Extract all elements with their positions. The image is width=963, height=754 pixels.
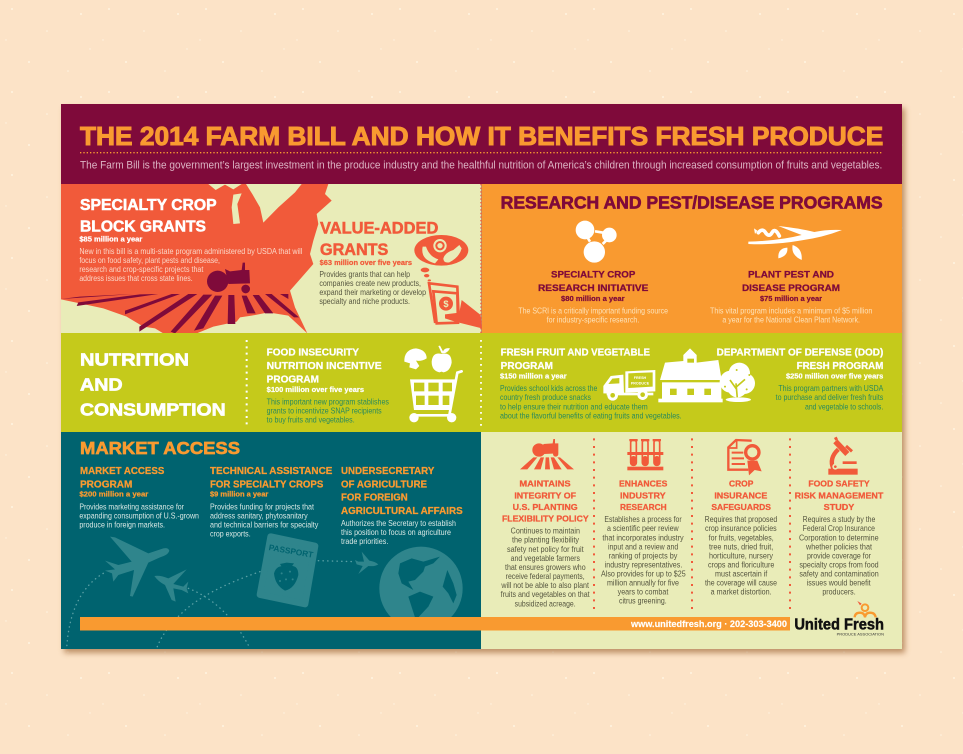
column: food safety risk management study: STUDY: [824, 502, 855, 512]
column: maintains integrity: that ensures growers who: [505, 563, 586, 572]
column: maintains integrity: U.S. PLANTING: [513, 502, 578, 512]
sub-block: fresh fruit and vegetable program: FRESH FRUIT AND VEGETABLE: [501, 348, 650, 359]
text: specialty crop body: address issues that cross state lines.: [79, 274, 193, 283]
icon: fruit tree: [720, 363, 755, 402]
sub-block: plant pest and disease program: DISEASE PROGRAM: [742, 283, 840, 293]
column: crop insurance safeguards: the coverage will cause: [705, 578, 777, 587]
column: technical assistance for specialty crops: crop exports.: [210, 530, 251, 539]
text: specialty crop body: focus on food safety, plant pests and disease,: [79, 256, 220, 265]
flight paths: [67, 561, 355, 648]
sub-block: department of defense fresh program: and vegetable to schools.: [805, 402, 883, 411]
column: crop insurance safeguards: [705, 440, 778, 597]
column: market access program: $200 million a year: [79, 490, 148, 499]
panel: policy safeguards: [481, 432, 902, 649]
column: food safety risk management study: safety and contamination: [799, 569, 879, 578]
column: market access program: MARKET ACCESS: [80, 466, 165, 477]
text: specialty crop body: research and crop-specific projects that: [79, 265, 204, 274]
text: value-added body: expand their marketing or develop: [319, 288, 426, 297]
column: undersecretary of agriculture: this position to focus on agriculture: [341, 528, 451, 537]
column: maintains integrity: fruits and vegetables on that: [501, 590, 590, 599]
column: crop insurance safeguards: crop insurance policies: [705, 524, 777, 533]
column: market access program: expanding consumption of U.S.-grown: [79, 511, 199, 520]
column: food safety risk management study: Corporation to determine: [799, 533, 879, 542]
sub-block: food insecurity nutrition incentive program: $100 million over five years: [267, 385, 364, 394]
column: undersecretary of agriculture: Authorizes the Secretary to establish: [341, 519, 456, 528]
icon: certificate with ribbon: [728, 440, 762, 475]
sub-block: specialty crop research initiative: [518, 270, 668, 324]
column: market access program: Provides marketing assistance for: [79, 502, 184, 511]
icon: passport: PASSPORT: [268, 542, 314, 560]
column: maintains integrity: FLEXIBILITY POLICY: [502, 513, 589, 523]
column: market access program: produce in foreign markets.: [79, 520, 165, 529]
sub-block: specialty crop research initiative: The SCRI is a critically important funding source: [518, 306, 668, 315]
heading: value-added grants: [320, 219, 439, 267]
column: maintains integrity: subsidized acreage.: [515, 599, 576, 608]
sub-block: plant pest and disease program: $75 million a year: [760, 294, 822, 303]
panel: market access: [61, 432, 481, 649]
column: food safety risk management study: RISK MANAGEMENT: [795, 490, 884, 500]
heading: specialty crop block grants: SPECIALTY CROP: [80, 197, 217, 214]
sub-block: plant pest and disease program: PLANT PEST AND: [748, 270, 834, 280]
icon: money in hand: [429, 283, 482, 328]
sub-block: food insecurity nutrition incentive program: to buy fruits and vegetables.: [267, 415, 355, 424]
panel: nutrition and consumption: [61, 333, 902, 432]
column: technical assistance for specialty crops: $9 million a year: [210, 490, 268, 499]
sub-block: plant pest and disease program: This vital program includes a minimum of $5 million: [710, 306, 872, 315]
icon: apple: [432, 346, 452, 372]
column: technical assistance for specialty crops: TECHNICAL ASSISTANCE: [210, 466, 333, 477]
column: crop insurance safeguards: for fruits, vegetables,: [709, 533, 774, 542]
column: undersecretary of agriculture: OF AGRICULTURE: [341, 479, 427, 490]
logo: United Fresh: United Fresh: [794, 616, 884, 633]
sub-block: fresh fruit and vegetable program: to help ensure their nutrition and educate them: [500, 402, 648, 411]
icon: test tubes: [627, 439, 663, 470]
sub-block: fresh fruit and vegetable program: $150 million a year: [500, 371, 567, 380]
heading: market access: MARKET ACCESS: [80, 438, 240, 458]
sub-block: food insecurity nutrition incentive program: NUTRITION INCENTIVE: [267, 361, 382, 372]
field furrows: [61, 294, 299, 333]
hills: [61, 299, 307, 333]
sub-block: specialty crop research initiative: SPECIALTY CROP: [551, 270, 635, 280]
column: undersecretary of agriculture: AGRICULTURAL AFFAIRS: [341, 506, 463, 517]
panel: header: [61, 104, 902, 184]
heading: specialty crop block grants: BLOCK GRANTS: [80, 219, 206, 236]
column: enhances industry research: million annually for five: [607, 578, 679, 587]
column: enhances industry research: citrus greening.: [619, 597, 667, 606]
sub-block: food insecurity nutrition incentive program: This important new program stablishes: [267, 397, 389, 406]
column: food safety risk management study: whether policies that: [805, 542, 873, 551]
icon: branch with worm: [748, 226, 842, 260]
text: specialty crop body: New in this bill is a multi-state program administered by USDA that will: [79, 247, 302, 256]
panel: specialty crop and value-added grants: [61, 184, 482, 333]
heading: nutrition and consumption: CONSUMPTION: [80, 400, 226, 420]
sub-block: fresh fruit and vegetable program: [500, 348, 682, 420]
column: market access program: [79, 466, 199, 529]
column: enhances industry research: ranking of projects by: [609, 551, 678, 560]
sub-block: specialty crop research initiative: for industry-specific research.: [547, 315, 639, 324]
sub-block: fresh fruit and vegetable program: country fresh produce snacks: [500, 393, 591, 402]
icon: molecule: [576, 221, 617, 263]
sub-block: fresh fruit and vegetable program: about the flavorful benefits of eating fruits and vegetables.: [500, 411, 682, 420]
column: crop insurance safeguards: SAFEGUARDS: [711, 502, 771, 512]
column: enhances industry research: a scientific peer review: [607, 524, 679, 533]
column: maintains integrity: [500, 439, 590, 608]
heading: RESEARCH AND PEST/DISEASE PROGRAMS: [501, 192, 883, 212]
column: market access program: PROGRAM: [80, 479, 132, 490]
sub-block: department of defense fresh program: This program partners with USDA: [778, 384, 884, 393]
title: THE 2014 FARM BILL AND HOW IT BENEFITS FRESH PRODUCE: [80, 121, 883, 151]
column: enhances industry research: RESEARCH: [620, 502, 667, 512]
column: enhances industry research: ENHANCES: [619, 479, 668, 489]
sub-block: fresh fruit and vegetable program: Provides school kids across the: [500, 384, 598, 393]
column: maintains integrity: MAINTAINS: [519, 479, 571, 489]
divider: red dotted line: [480, 184, 482, 333]
heading: nutrition and consumption: AND: [80, 375, 123, 395]
column: crop insurance safeguards: Requires that proposed: [705, 515, 778, 524]
column: maintains integrity: the planting flexibility: [512, 536, 580, 545]
sub-block: department of defense fresh program: FRESH PROGRAM: [797, 361, 883, 372]
column: crop insurance safeguards: horticulture, nursery: [709, 551, 774, 560]
icon: globe: [379, 547, 463, 630]
text: value-added body: [319, 270, 426, 306]
icon: barn: [658, 348, 723, 402]
column: enhances industry research: [601, 439, 686, 606]
column: enhances industry research: input and a review and: [608, 542, 679, 551]
map of the United States: [61, 184, 332, 333]
heading: value-added grants: GRANTS: [320, 241, 388, 259]
column: food safety risk management study: producers.: [822, 588, 856, 597]
column: crop insurance safeguards: crops and floriculture: [708, 560, 775, 569]
column: maintains integrity: receive federal payments,: [506, 572, 585, 581]
icon: shopping cart: [409, 371, 462, 422]
sub-block: fresh fruit and vegetable program: PROGRAM: [501, 361, 553, 372]
sub-block: food insecurity nutrition incentive program: [267, 348, 389, 424]
column: maintains integrity: INTEGRITY OF: [514, 490, 576, 500]
text: specialty crop body: [79, 247, 302, 283]
icon: large airplane: [105, 537, 169, 597]
column: technical assistance for specialty crops: Provides funding for projects that: [210, 502, 315, 511]
sub-block: department of defense fresh program: $250 million over five years: [786, 371, 883, 380]
column: crop insurance safeguards: tree nuts, dried fruit,: [709, 542, 773, 551]
column: technical assistance for specialty crops: [210, 466, 333, 539]
column: crop insurance safeguards: INSURANCE: [714, 490, 768, 500]
sub-block: specialty crop research initiative: RESEARCH INITIATIVE: [538, 283, 648, 293]
column: undersecretary of agriculture: UNDERSECRETARY: [341, 466, 435, 477]
column: technical assistance for specialty crops: and technical barriers for specialty: [210, 520, 319, 529]
text: value-added body: Provides grants that can help: [319, 270, 410, 279]
column: technical assistance for specialty crops: address sanitary, phytosanitary: [210, 511, 308, 520]
icon: delivery truck: PRODUCE: [631, 381, 650, 385]
sub-block: food insecurity nutrition incentive program: PROGRAM: [267, 374, 319, 385]
column: enhances industry research: industry representatives.: [605, 560, 682, 569]
heading: nutrition and consumption: NUTRITION: [80, 350, 189, 370]
column: food safety risk management study: Federal Crop Insurance: [803, 524, 875, 533]
column: food safety risk management study: FOOD SAFETY: [808, 479, 870, 489]
sub-block: plant pest and disease program: [710, 270, 872, 324]
heading: specialty crop block grants: $85 million a year: [79, 235, 142, 244]
panel: research and pest/disease programs: [482, 184, 902, 333]
icon: microscope: [828, 438, 858, 475]
sub-block: plant pest and disease program: a year for the National Clean Plant Network.: [722, 315, 860, 324]
column: enhances industry research: Also provides for up to $25: [601, 569, 686, 578]
sub-block: food insecurity nutrition incentive program: FOOD INSECURITY: [267, 348, 359, 359]
column: undersecretary of agriculture: [341, 466, 463, 546]
column: enhances industry research: years to combat: [618, 588, 669, 597]
column: maintains integrity: and vegetable farmers: [511, 554, 580, 563]
column: food safety risk management study: provide coverage for: [807, 551, 871, 560]
icon: thought bubble with produce: [414, 235, 468, 281]
icon: mushroom: [404, 348, 427, 369]
icon: tractor and furrows: [520, 439, 574, 469]
column: maintains integrity: will not be able to also plant: [500, 581, 590, 590]
column: undersecretary of agriculture: FOR FOREIGN: [341, 493, 408, 504]
column: undersecretary of agriculture: trade priorities.: [341, 537, 388, 546]
icon: small airplane: [154, 569, 188, 602]
column: food safety risk management study: [795, 438, 884, 597]
panel shadow: [64, 108, 905, 653]
column: enhances industry research: Establishes a process for: [604, 515, 682, 524]
heading: nutrition and consumption: [80, 350, 226, 420]
sub-block: food insecurity nutrition incentive program: grants to incentivize SNAP recipients: [267, 406, 382, 415]
icon: money in hand: $: [443, 299, 449, 309]
sub-block: department of defense fresh program: DEPARTMENT OF DEFENSE (DOD): [717, 348, 883, 359]
sub-block: specialty crop research initiative: $80 million a year: [561, 294, 625, 303]
footer bar: www.unitedfresh.org · 202-303-3400: [630, 619, 787, 629]
column: food safety risk management study: specialty crops from food: [799, 560, 879, 569]
column: food safety risk management study: issues would benefit: [807, 578, 871, 587]
column: enhances industry research: INDUSTRY: [620, 490, 666, 500]
column: enhances industry research: that incorporates industry: [602, 533, 684, 542]
icon: tractor: [207, 263, 250, 293]
text: value-added body: companies create new products,: [319, 279, 421, 288]
icon: airplane near globe: [355, 552, 378, 574]
column: technical assistance for specialty crops: FOR SPECIALTY CROPS: [210, 479, 324, 490]
icon: delivery truck: [603, 370, 655, 401]
heading: specialty crop block grants: [79, 197, 217, 244]
footer bar: [80, 617, 790, 630]
heading: value-added grants: VALUE-ADDED: [320, 219, 439, 237]
logo: United Fresh: [794, 601, 884, 637]
sub-block: department of defense fresh program: [717, 348, 884, 411]
heading: value-added grants: $63 million over five years: [320, 258, 412, 267]
column: maintains integrity: Continues to maintain: [511, 526, 580, 535]
column: crop insurance safeguards: CROP: [729, 479, 754, 489]
column: maintains integrity: safety net policy for fruit: [507, 545, 584, 554]
logo: United Fresh: PRODUCE ASSOCIATION: [837, 632, 884, 637]
icon: passport: [260, 537, 315, 604]
column: food safety risk management study: Requires a study by the: [803, 515, 876, 524]
icon: delivery truck: FRESH: [634, 376, 647, 380]
text: value-added body: specialty and niche products.: [319, 297, 410, 306]
column: crop insurance safeguards: a market distortion.: [711, 588, 772, 597]
sub-block: department of defense fresh program: to purchase and deliver fresh fruits: [776, 393, 883, 402]
column: crop insurance safeguards: must ascertain if: [715, 569, 768, 578]
subtitle: The Farm Bill is the government’s largest investment in the produce industry and the healthful nutrition of America’s children through increased consumption of fruits and vegetables.: [80, 159, 882, 171]
